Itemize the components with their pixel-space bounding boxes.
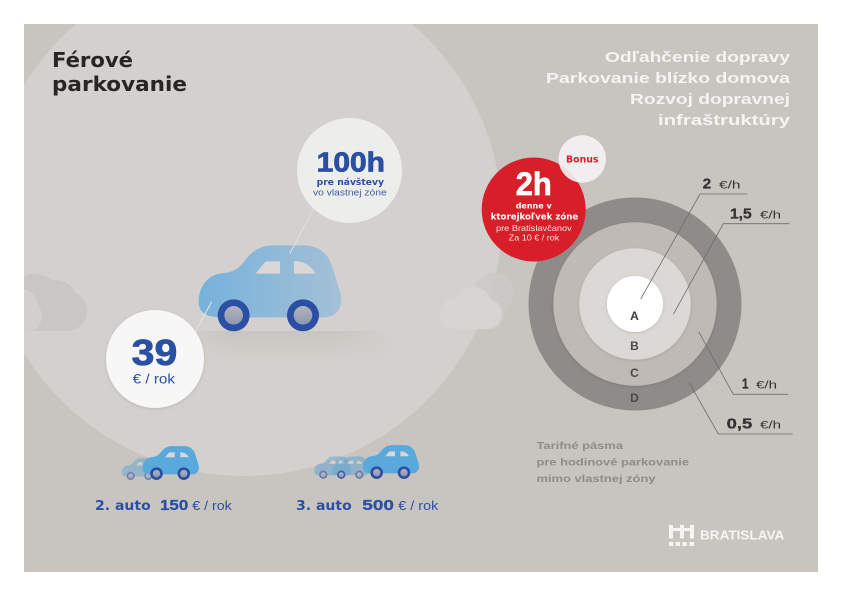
callout: 100h: pre návštevy bbox=[317, 177, 384, 188]
third car price: 3. auto bbox=[296, 498, 352, 514]
back car 1 bbox=[314, 456, 351, 479]
connector: visitors callout bbox=[290, 209, 313, 253]
back car bbox=[122, 458, 158, 480]
second car price: € / rok bbox=[192, 498, 232, 513]
tariff caption: pre hodinové parkovanie bbox=[536, 458, 690, 468]
logo mark bbox=[669, 525, 694, 546]
rate labels: €/h bbox=[719, 180, 740, 192]
rate labels: 1,5 bbox=[730, 206, 752, 222]
second car price bbox=[95, 498, 232, 514]
second car price: 2. auto bbox=[95, 498, 151, 514]
main car bbox=[199, 245, 341, 331]
callout: 39 euro per year: 39 bbox=[132, 332, 177, 373]
third car price bbox=[296, 498, 439, 514]
zone letters: C bbox=[630, 366, 639, 380]
Bratislava logo bbox=[669, 525, 785, 546]
red callout: 2h: denne v bbox=[516, 202, 552, 211]
large light circle bbox=[0, 0, 502, 476]
benefits list: infraštruktúry bbox=[658, 112, 791, 129]
bonus badge: Bonus bbox=[566, 154, 599, 166]
rate labels: 1 bbox=[742, 376, 748, 392]
rate labels: €/h bbox=[756, 380, 777, 392]
tariff caption bbox=[536, 441, 690, 485]
zone letters: A bbox=[630, 309, 639, 323]
rate labels bbox=[703, 177, 781, 432]
third car price: 500 bbox=[362, 498, 394, 514]
callout: 39 euro per year bbox=[106, 310, 204, 408]
zone letters: D bbox=[630, 391, 639, 405]
callout: 39 euro per year: € / rok bbox=[133, 370, 176, 386]
second car group bbox=[122, 446, 199, 480]
benefits list: Parkovanie blízko domova bbox=[546, 70, 791, 87]
logo wordmark: BRATISLAVA bbox=[700, 527, 785, 542]
cloud: left bbox=[24, 274, 87, 331]
rate labels: 0,5 bbox=[727, 416, 752, 432]
tariff caption: mimo vlastnej zóny bbox=[536, 474, 656, 485]
benefits list bbox=[546, 49, 791, 129]
second car price: 150 bbox=[160, 498, 188, 514]
callout: 100h bbox=[297, 118, 402, 223]
callout: 100h: 100h bbox=[317, 146, 385, 178]
connector: price callout bbox=[196, 302, 212, 331]
benefits list: Odľahčenie dopravy bbox=[605, 49, 791, 66]
leader lines bbox=[641, 194, 793, 434]
title: Férové bbox=[52, 48, 133, 72]
front car bbox=[143, 446, 199, 480]
zone B bbox=[579, 248, 691, 360]
third car group bbox=[314, 445, 419, 479]
title: parkovanie bbox=[52, 72, 187, 96]
zone letters bbox=[630, 309, 639, 405]
bonus badge bbox=[559, 135, 606, 183]
zone letters: B bbox=[630, 339, 639, 353]
zone D bbox=[528, 198, 742, 410]
rate labels: 2 bbox=[703, 177, 711, 193]
ground shadow bbox=[216, 331, 352, 340]
rate labels: €/h bbox=[760, 210, 781, 222]
benefits list: Rozvoj dopravnej bbox=[630, 91, 790, 108]
callout: 100h: vo vlastnej zóne bbox=[313, 188, 387, 198]
red callout: 2h bbox=[482, 158, 586, 262]
red callout: 2h: ktorejkoľvek zóne bbox=[491, 211, 579, 222]
third car price: € / rok bbox=[398, 498, 439, 513]
tariff caption: Tarifné pásma bbox=[536, 441, 624, 452]
zone C bbox=[553, 222, 717, 386]
back car 2 bbox=[332, 456, 369, 479]
zone A bbox=[607, 276, 663, 332]
red callout: 2h: 2h bbox=[516, 166, 552, 202]
red callout: 2h: pre Bratislavčanov bbox=[496, 223, 573, 233]
red callout: 2h: Za 10 € / rok bbox=[509, 232, 560, 242]
front car bbox=[363, 445, 419, 479]
tariff zone rings bbox=[528, 198, 742, 410]
rate labels: €/h bbox=[760, 420, 781, 432]
cloud: right bbox=[439, 273, 514, 329]
